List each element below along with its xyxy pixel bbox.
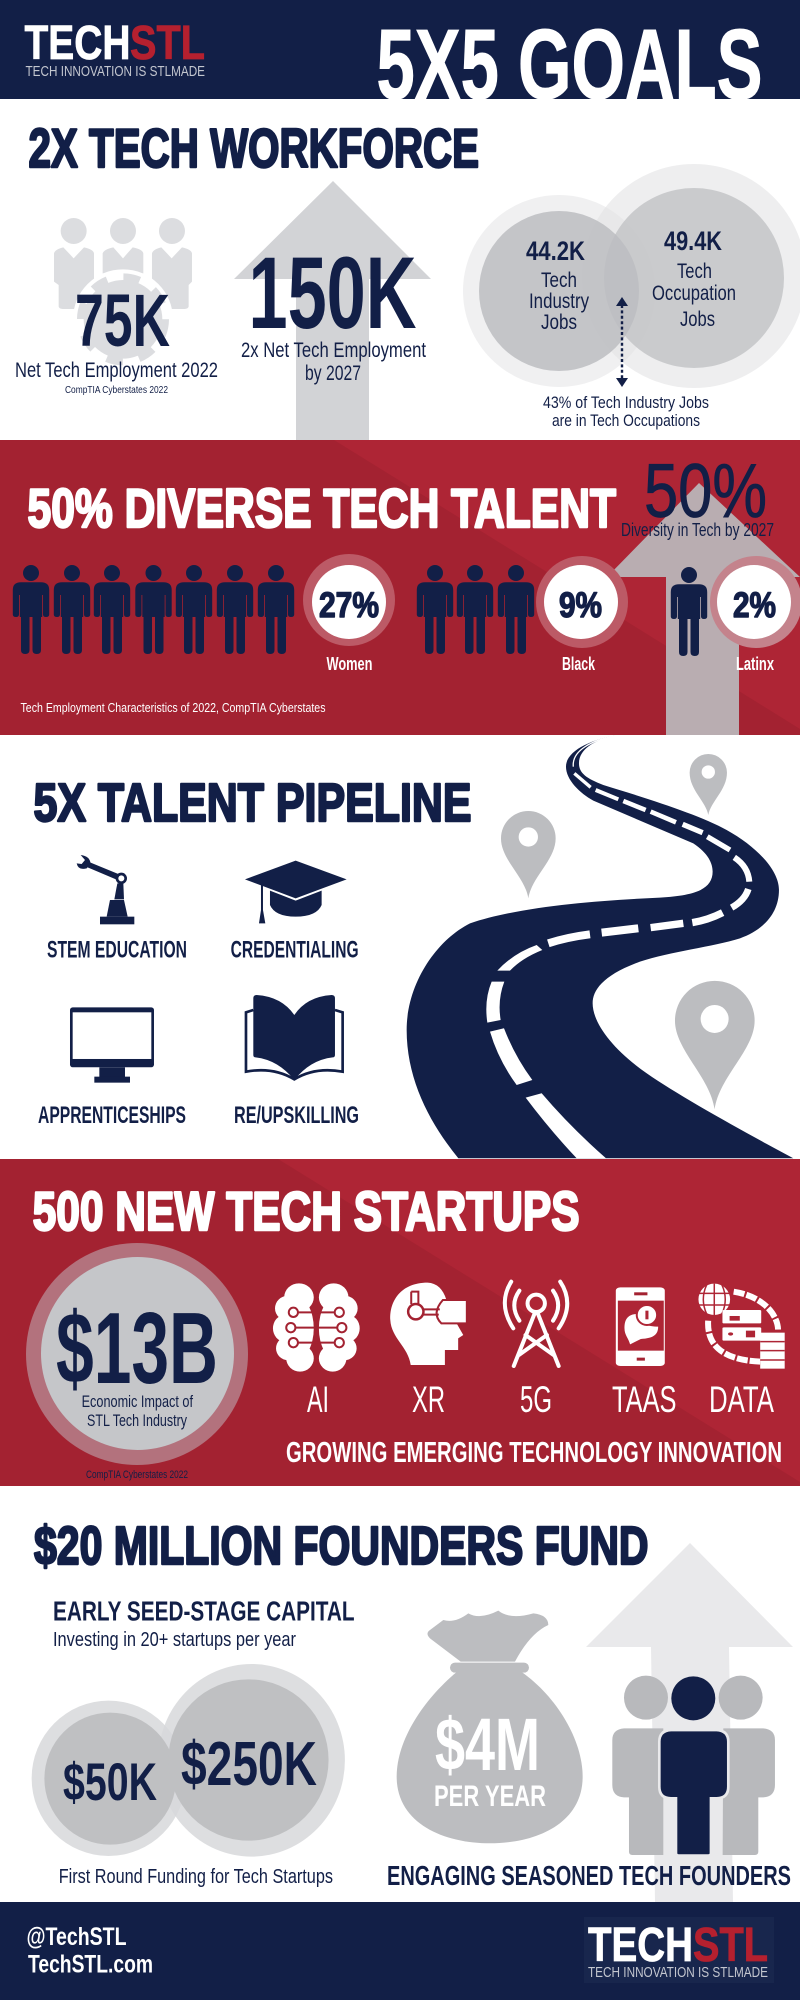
chart: venn diagram of tech jobs: Jobs	[541, 311, 577, 334]
label: first round funding: First Round Funding for Tech Startups	[59, 1866, 333, 1888]
caption: 43 percent	[543, 393, 709, 430]
heading: 500 New Tech Startups: 500 NEW TECH STARTUPS	[33, 1181, 580, 1242]
icon: growth arrow	[607, 483, 800, 735]
label: DATA: DATA	[709, 1379, 774, 1420]
label: 5G: 5G	[520, 1379, 552, 1420]
logo: TechSTL: TECH	[588, 1919, 693, 1972]
icon: large growth arrow	[234, 181, 431, 440]
chart: venn diagram of tech jobs: Tech	[541, 269, 577, 292]
stat: black 9%: 9%	[559, 586, 602, 625]
stat: latinx 2%: 2%	[733, 586, 776, 625]
panel: header	[0, 0, 800, 120]
icon: pale growth arrow	[586, 1543, 793, 1902]
icon: XR headset	[390, 1283, 467, 1365]
label: 2x net tech employment: by 2027	[305, 362, 361, 385]
caption: 43 percent: 43% of Tech Industry Jobs	[543, 393, 709, 412]
icon: money bag with $4M	[397, 1611, 583, 1843]
stat: $13B economic impact: Economic Impact of	[82, 1392, 193, 1411]
heading: 5X Talent Pipeline: 5X TALENT PIPELINE	[34, 773, 472, 833]
contact: handle and website: @TechSTL	[26, 1923, 126, 1951]
source: CompTIA: CompTIA Cyberstates 2022	[65, 384, 168, 396]
icon: money bag with $4M: $4M	[435, 1703, 540, 1786]
label: apprenticeships: APPRENTICESHIPS	[38, 1102, 186, 1129]
text: investing in startups: Investing in 20+ startups per year	[53, 1629, 296, 1651]
icon: one person	[671, 567, 707, 656]
icon: people and gear	[54, 218, 192, 369]
label: credentialing: CREDENTIALING	[231, 937, 359, 964]
label: re/upskilling: RE/UPSKILLING	[234, 1102, 359, 1129]
icon: winding road	[407, 736, 793, 1158]
chart: venn diagram of tech jobs: Tech	[677, 260, 712, 283]
icon: founders group	[612, 1676, 775, 1856]
heading: 2X Tech Workforce: 2X TECH WORKFORCE	[28, 118, 479, 179]
panel: 500 new tech startups	[0, 1159, 800, 1486]
chart: funding circles	[32, 1664, 345, 1857]
chart: funding circles: $50K	[63, 1753, 157, 1812]
icon: graduation cap	[245, 861, 347, 923]
subheading: early seed-stage capital: EARLY SEED-STAGE CAPITAL	[53, 1596, 355, 1627]
icon: data server	[698, 1284, 785, 1369]
logo: TechSTL	[584, 1917, 774, 1983]
contact: handle and website: TechSTL.com	[28, 1951, 153, 1979]
chart: venn diagram of tech jobs: Industry	[529, 290, 589, 313]
stat: $13B economic impact: STL Tech Industry	[87, 1411, 187, 1430]
logo: TechSTL: STL	[130, 17, 205, 70]
stat: latinx 2%: Latinx	[736, 654, 774, 674]
label: 2x net tech employment: 2x Net Tech Employment	[241, 339, 426, 362]
stat: 150K: 150K	[248, 236, 416, 350]
icon: AI brain	[273, 1283, 360, 1372]
stat: black 9%	[536, 556, 628, 674]
label: STEM education: STEM EDUCATION	[47, 937, 187, 964]
stat: $13B economic impact: $13B	[56, 1293, 218, 1405]
chart: funding circles: $250K	[181, 1730, 317, 1799]
source: tech employment characteristics: Tech Employment Characteristics of 2022, CompTIA Cyberstates	[20, 700, 326, 715]
chart: venn diagram of tech jobs	[463, 164, 800, 388]
panel: 50% diverse tech talent	[0, 440, 800, 735]
label: XR: XR	[412, 1379, 445, 1420]
chart: venn diagram of tech jobs: 49.4K	[664, 226, 722, 256]
stat: black 9%: Black	[562, 654, 596, 674]
chart: venn diagram of tech jobs: Occupation	[652, 282, 736, 305]
panel: 2x tech workforce	[15, 118, 800, 440]
logo: TechSTL: TECH	[24, 17, 130, 70]
icon: 5G tower	[505, 1282, 567, 1366]
stat: 75K: 75K	[75, 279, 170, 362]
chart: venn diagram of tech jobs: 44.2K	[526, 236, 585, 266]
panel: $20 million founders fund	[32, 1516, 793, 1902]
stat: women 27%: 27%	[319, 586, 379, 625]
logo: TechSTL	[24, 17, 205, 80]
icon: robot arm	[77, 855, 134, 924]
source: CompTIA: CompTIA Cyberstates 2022	[86, 1469, 188, 1481]
icon: phone with message	[616, 1287, 665, 1366]
label: 2x net tech employment	[241, 339, 426, 385]
icon: three people	[417, 565, 534, 654]
icon: location pins	[501, 754, 755, 1109]
stat: women 27%: Women	[326, 654, 372, 674]
icon: computer monitor	[70, 1007, 154, 1083]
label: TAAS: TAAS	[612, 1379, 676, 1420]
heading: 50% Diverse Tech Talent: 50% DIVERSE TECH TALENT	[28, 478, 616, 539]
stat: 50%: 50%	[644, 449, 767, 534]
panel: footer	[0, 1902, 800, 2000]
contact: handle and website	[26, 1923, 153, 1979]
label: AI: AI	[307, 1379, 329, 1420]
arrow: dotted double-headed	[616, 297, 628, 387]
label: net tech employment: Net Tech Employment 2022	[15, 359, 218, 382]
stat: women 27%	[303, 554, 395, 674]
logo: TechSTL: TECH INNOVATION IS STLMADE	[26, 63, 205, 80]
chart: venn diagram of tech jobs: Jobs	[680, 308, 715, 331]
icon: seven people	[13, 565, 294, 654]
panel: 5x talent pipeline	[34, 736, 793, 1158]
stat: $13B economic impact	[26, 1243, 248, 1465]
caption: 43 percent: are in Tech Occupations	[552, 411, 700, 430]
icon: money bag with $4M: PER YEAR	[434, 1780, 546, 1813]
logo: TechSTL: STL	[693, 1919, 768, 1972]
icon: open book	[246, 995, 343, 1080]
stat: latinx 2%	[710, 556, 800, 674]
